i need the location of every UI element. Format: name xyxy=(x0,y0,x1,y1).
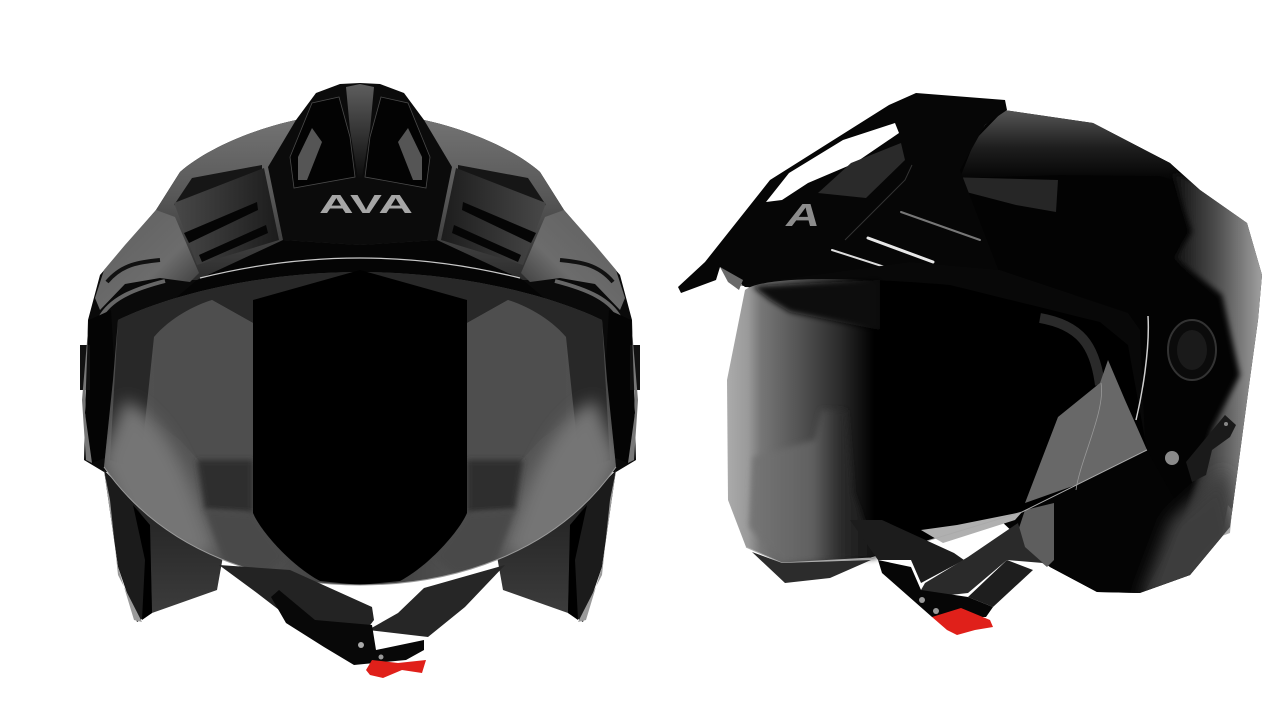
frame highlight lines xyxy=(1076,316,1148,490)
rear flap xyxy=(1222,505,1232,536)
chin bar under visor xyxy=(752,552,871,583)
visor top shadow xyxy=(752,280,880,330)
dial xyxy=(1168,320,1216,380)
mesh vent xyxy=(945,177,1058,212)
helmet illustration xyxy=(80,83,1262,678)
rear shell highlight xyxy=(1140,172,1270,600)
dome highlight xyxy=(960,110,1190,185)
left half of front shell xyxy=(80,83,360,622)
front view helmet xyxy=(80,83,640,678)
side latch xyxy=(1165,415,1236,482)
side shell xyxy=(950,110,1262,593)
peak vent slots xyxy=(832,212,980,277)
right cheek grey panel xyxy=(1025,360,1147,503)
peak: A xyxy=(782,197,825,233)
side visor lens xyxy=(727,279,1147,563)
chin strap xyxy=(219,565,505,665)
side view helmet xyxy=(678,93,1270,635)
lens lower edge xyxy=(746,450,1147,563)
red strap tab xyxy=(932,608,993,635)
side chin strap xyxy=(850,520,1043,617)
AVA logo: AVA xyxy=(319,189,413,219)
side ear pad and lower shell xyxy=(1020,450,1175,593)
side visor frame xyxy=(740,262,1145,440)
inner chin piece xyxy=(749,410,878,562)
inner frame xyxy=(1040,318,1100,385)
peak xyxy=(678,93,1010,300)
neck grey panel xyxy=(1015,503,1054,567)
red strap tab xyxy=(366,660,426,678)
gap under visor xyxy=(921,512,1022,543)
right half of front shell xyxy=(360,83,640,622)
